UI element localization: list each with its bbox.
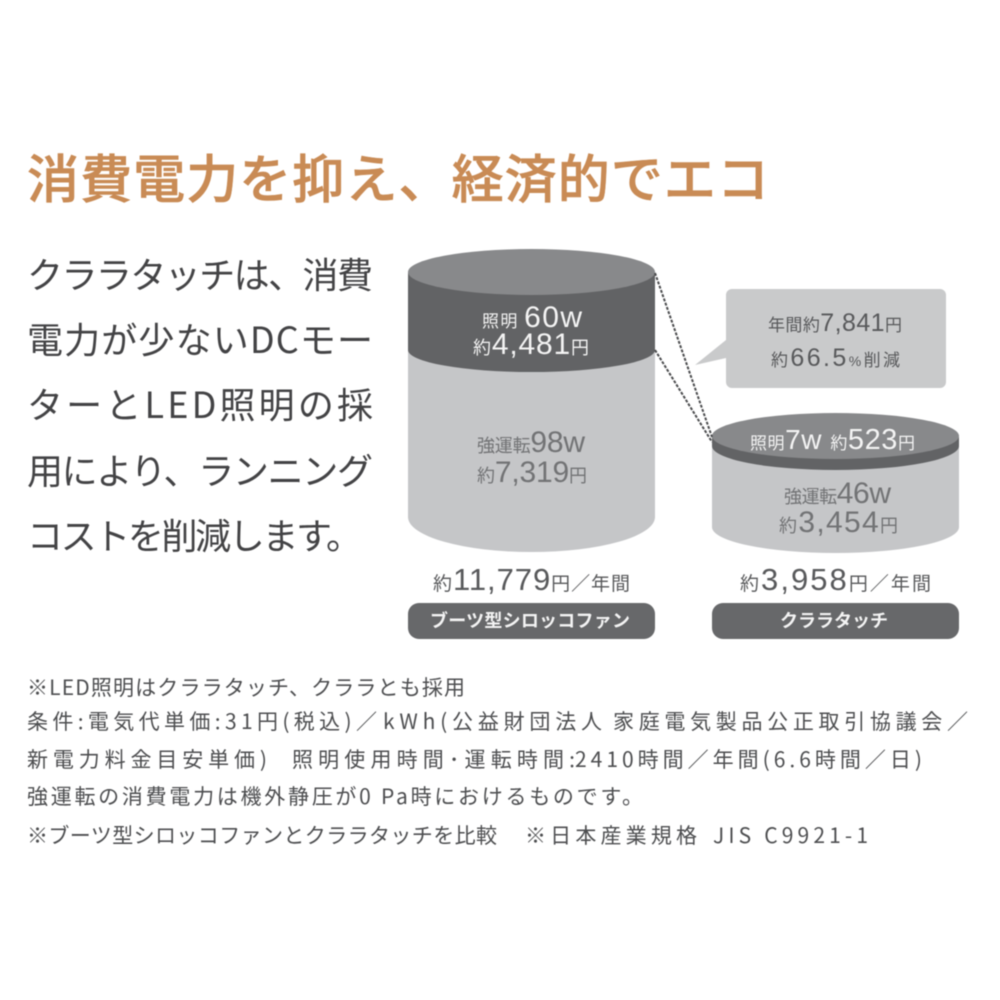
text block: description: コストを削減します。 [27,508,362,560]
footnotes: ※LED照明はクララタッチ、クララとも採用 [27,672,465,702]
callout: annual saving [695,289,946,388]
label: strong operation 46w: 強運転46w [784,477,891,510]
cylinder body: strong operation [712,437,959,553]
total: Clara Touch annual cost: 約3,958円／年間 [740,562,931,597]
footnotes: 2410時間／年間(6.6時間／日) [575,744,922,774]
text block: description [27,247,373,560]
label: lighting 7w and cost: 照明7w 約523円 [750,424,915,456]
callout text: annual saving amount: 年間約7,841円 [768,309,902,337]
text block: description: 電力が少ないDCモー [27,312,373,364]
footnotes: ※ブーツ型シロッコファンとクララタッチを比較 [27,820,497,850]
total: boots-type fan annual cost: 約11,779円／年間 [433,562,630,597]
footnotes: 条件:電気代単価:31円(税込)／ [27,706,377,736]
callout text: saving percent: 約66.5%削減 [771,344,900,372]
footnotes: kWh(公益財団法人 [383,706,602,736]
chart: Clara Touch cylinder [712,413,959,553]
name pill: Clara Touch [712,603,959,639]
dashed connector lines [655,273,712,442]
label: lighting 60w: 照明 60w [482,301,582,334]
cylinder band: lighting [712,437,959,470]
cylinder top [712,413,959,459]
footnotes: 強運転の消費電力は機外静圧が0 Pa時におけるものです。 [27,781,643,811]
footnotes: JIS C9921-1 [713,820,868,850]
label: lighting cost: 約4,481円 [473,328,589,361]
footnotes: 家庭電気製品公正取引協議会／ [613,706,968,736]
footnotes: ※日本産業規格 [525,820,697,850]
title: 消費電力を抑え、経済的でエコ [27,138,769,213]
cylinder body: strong operation [408,272,655,552]
label: strong operation cost: 約7,319円 [477,456,587,489]
text block: description: クララタッチは、消費 [27,247,373,299]
label: strong operation cost: 約3,454円 [779,506,898,539]
footnotes: 照明使用時間･運転時間: [292,744,575,774]
text block: description: 用により、ランニング [27,443,373,495]
footnotes: 新電力料金目安単価) [27,744,267,774]
cylinder top [408,249,655,295]
name pill: boots-type sirocco fan [408,603,655,639]
name pill: boots-type sirocco fan: ブーツ型シロッコファン [430,607,630,633]
label: strong operation 98w: 強運転98w [477,426,585,459]
text block: description: ターとLED照明の採 [27,377,373,429]
name pill: Clara Touch: クララタッチ [780,607,888,633]
chart: boots-type sirocco fan cylinder [408,249,655,552]
footnotes [27,672,968,850]
cylinder band: lighting [408,272,655,372]
